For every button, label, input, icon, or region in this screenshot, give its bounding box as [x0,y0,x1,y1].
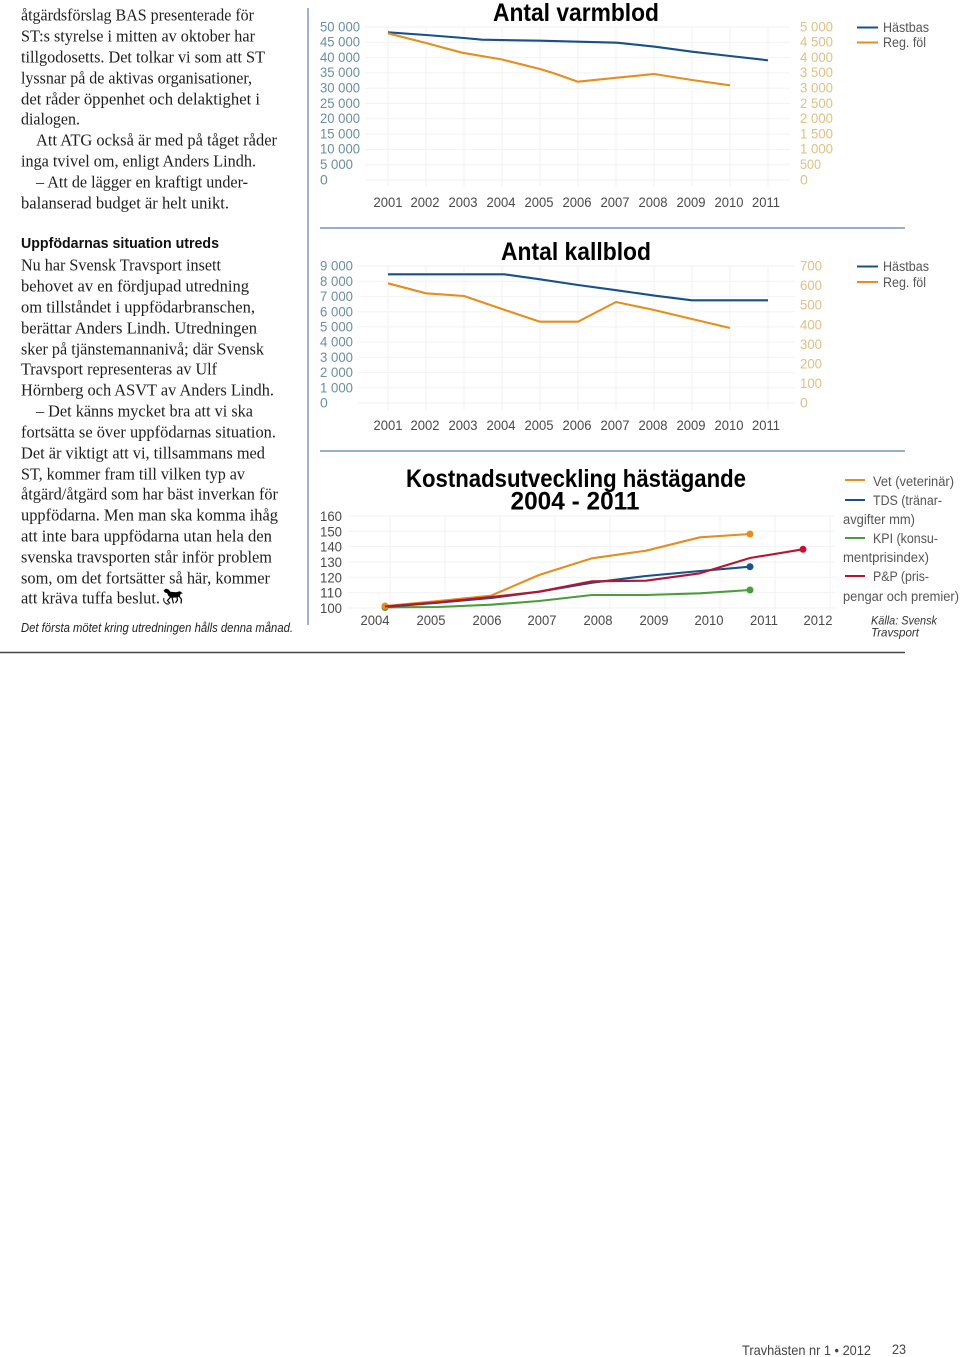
text block: article intro: tillgodosetts. Det tolkar vi som att ST [21,48,265,67]
x axis years: 2006 [562,417,592,433]
legend: avgifter mm) [843,512,915,527]
x axis years: 2011 [752,417,780,433]
right axis: 2 500 [800,95,833,111]
right axis: 600 [800,277,822,293]
text block: breeders article: att kräva tuffa beslut. [21,589,160,608]
legend: P&P (pris- [873,569,929,584]
text block: breeders article: som, om det fortsätter så här, kommer [21,569,270,588]
heading: Uppfödarnas situation utreds: Uppfödarnas situation utreds [21,236,219,252]
chart: Antal kallblod [320,238,929,433]
text block: article intro: lyssnar på de aktivas organisationer, [21,69,252,88]
text block: article intro: det råder öppenhet och delaktighet i [21,90,260,109]
x axis years: 2010 [694,612,724,628]
left axis: 35 000 [320,64,360,80]
x axis years: 2002 [410,417,440,433]
x axis years: 2005 [524,417,554,433]
x axis years: 2011 [750,612,778,628]
left axis: 6 000 [320,303,353,319]
line: Reg. föl [388,283,730,328]
x axis years [374,417,780,433]
x axis years: 2008 [638,194,668,210]
text block: breeders article: svenska travsporten står inför problem [21,548,272,567]
right axis [800,258,822,411]
x axis years: 2003 [448,417,478,433]
right axis: 0 [800,395,808,411]
footer: magazine and page number: 23 [892,1341,906,1357]
left axis: 150 [320,523,342,539]
x axis years: 2005 [524,194,554,210]
line: P&P [385,546,806,606]
text block: article intro [21,6,278,213]
left axis: 110 [320,585,342,601]
text block: breeders article: Nu har Svensk Travsport insett [21,256,221,275]
left axis: 3 000 [320,349,353,365]
right axis: 2 000 [800,110,833,126]
left axis: 8 000 [320,273,353,289]
x axis years: 2005 [416,612,446,628]
right axis: 3 500 [800,64,833,80]
left axis: 160 [320,508,342,524]
left axis: 100 [320,600,342,616]
x axis years: 2002 [410,194,440,210]
line: Hästbas [388,32,768,60]
text block: article intro: dialogen. [21,110,80,129]
chart: Kostnadsutveckling hästägande: 2004 - 2011 [510,488,640,516]
x axis years: 2008 [584,612,613,628]
left axis: 9 000 [320,258,353,274]
x axis years: 2004 [486,417,516,433]
chart title: Kostnadsutveckling hästägande [406,465,746,493]
legend: TDS (tränar- [873,493,942,508]
line: Vet [382,530,754,610]
text block: breeders article: Travsport representeras av Ulf [21,360,217,379]
text block: breeders article: att inte bara uppfödarna utan hela den [21,527,272,546]
text block: breeders article: sker på tjänstemannanivå; där Svensk [21,340,265,359]
left axis: 20 000 [320,110,360,126]
source note: Källa: Svensk [871,614,938,628]
text block: article intro: – Att de lägger en kraftigt under- [35,173,248,192]
source note: Travsport [871,626,920,640]
line: KPI [382,586,754,611]
source note [871,614,938,640]
left axis: 0 [320,171,328,187]
x axis years: 2010 [714,194,744,210]
right axis: 4 500 [800,34,833,50]
x axis years: 2007 [528,612,557,628]
legend: Reg. föl [883,275,926,290]
text block: breeders article: Hörnberg och ASVT av Anders Lindh. [21,381,274,400]
right axis: 3 000 [800,79,833,95]
chart title: Antal kallblod [501,238,651,266]
right axis: 500 [800,297,822,313]
left axis: 30 000 [320,79,360,95]
left axis: 15 000 [320,125,360,141]
right axis: 300 [800,336,822,352]
line: TDS [385,563,754,607]
left axis: 0 [320,395,328,411]
text block: article intro: ST:s styrelse i mitten av oktober har [21,27,255,46]
text block: article intro: inga tvivel om, enligt Anders Lindh. [21,152,256,171]
left axis: 1 000 [320,379,353,395]
x axis years: 2003 [448,194,478,210]
text block: breeders article: – Det känns mycket bra att vi ska [35,402,254,421]
line: Hästbas [388,274,768,300]
x axis years: 2009 [640,612,669,628]
left axis: 130 [320,554,342,570]
text block: breeders article: uppfödarna. Men man ska komma ihåg [21,506,278,525]
text block: breeders article [21,256,278,608]
left axis [320,18,360,187]
x axis years: 2007 [600,417,630,433]
x axis years: 2010 [714,417,744,433]
left axis: 50 000 [320,18,360,34]
legend: Hästbas [883,259,929,274]
right axis: 400 [800,316,822,332]
text block: breeders article: Det är viktigt att vi, tillsammans med [21,444,266,463]
left axis [320,258,353,411]
left axis: 45 000 [320,34,360,50]
right axis: 1 500 [800,125,833,141]
text block: article intro: balanserad budget är helt unikt. [21,194,229,213]
right axis [800,18,833,187]
x axis years: 2012 [804,612,833,628]
left axis: 10 000 [320,141,360,157]
right axis: 5 000 [800,18,833,34]
x axis years [360,612,833,628]
right axis: 4 000 [800,49,833,65]
text block: breeders article: ST, kommer fram till vilken typ av [21,465,246,484]
legend: KPI (konsu- [873,531,938,546]
text block: breeders article: fortsätta se över uppfödarnas situation. [21,423,276,442]
text block: article intro: åtgärdsförslag BAS presenterade för [21,6,254,25]
left axis: 5 000 [320,156,353,172]
x axis years: 2006 [562,194,592,210]
left axis: 4 000 [320,334,353,350]
legend: Hästbas [883,20,929,35]
left axis: 25 000 [320,95,360,111]
text block: breeders article: åtgärd/åtgärd som har bäst inverkan för [21,485,278,504]
text block: breeders article: behovet av en fördjupad utredning [21,277,249,296]
x axis years: 2001 [374,417,403,433]
legend: Reg. föl [883,35,926,50]
left axis: 140 [320,539,342,555]
right axis: 700 [800,258,822,274]
legend [857,20,929,50]
right axis: 500 [800,156,821,172]
x axis years: 2004 [486,194,516,210]
left axis: 2 000 [320,364,353,380]
chart: Antal varmblod [320,0,929,210]
left axis: 40 000 [320,49,360,65]
x axis years: 2001 [374,194,403,210]
left axis [320,508,342,616]
legend: mentprisindex) [843,550,929,565]
x axis years [374,194,780,210]
left axis: 120 [320,569,342,585]
line: Reg. föl [388,33,730,85]
right axis: 1 000 [800,141,833,157]
x axis years: 2007 [600,194,630,210]
right axis: 100 [800,375,822,391]
right axis: 0 [800,171,808,187]
chart: Kostnadsutveckling hästägande [320,465,959,640]
text block: breeders article: om tillståndet i uppfödarbranschen, [21,298,255,317]
legend [843,474,959,604]
x axis years: 2011 [752,194,780,210]
caption: first meeting: Det första mötet kring utredningen hålls denna månad. [21,621,293,635]
x axis years: 2008 [638,417,668,433]
left axis: 5 000 [320,318,353,334]
x axis years: 2006 [472,612,502,628]
text block: article intro: Att ATG också är med på tåget råder [36,131,278,150]
legend [857,259,929,290]
x axis years: 2009 [676,417,706,433]
left axis: 7 000 [320,288,353,304]
icon: trotting horse [164,589,183,604]
right axis: 200 [800,355,822,371]
legend: Vet (veterinär) [873,474,954,489]
x axis years: 2009 [676,194,706,210]
x axis years: 2004 [360,612,390,628]
text block: breeders article: berättar Anders Lindh. Utredningen [21,319,257,338]
